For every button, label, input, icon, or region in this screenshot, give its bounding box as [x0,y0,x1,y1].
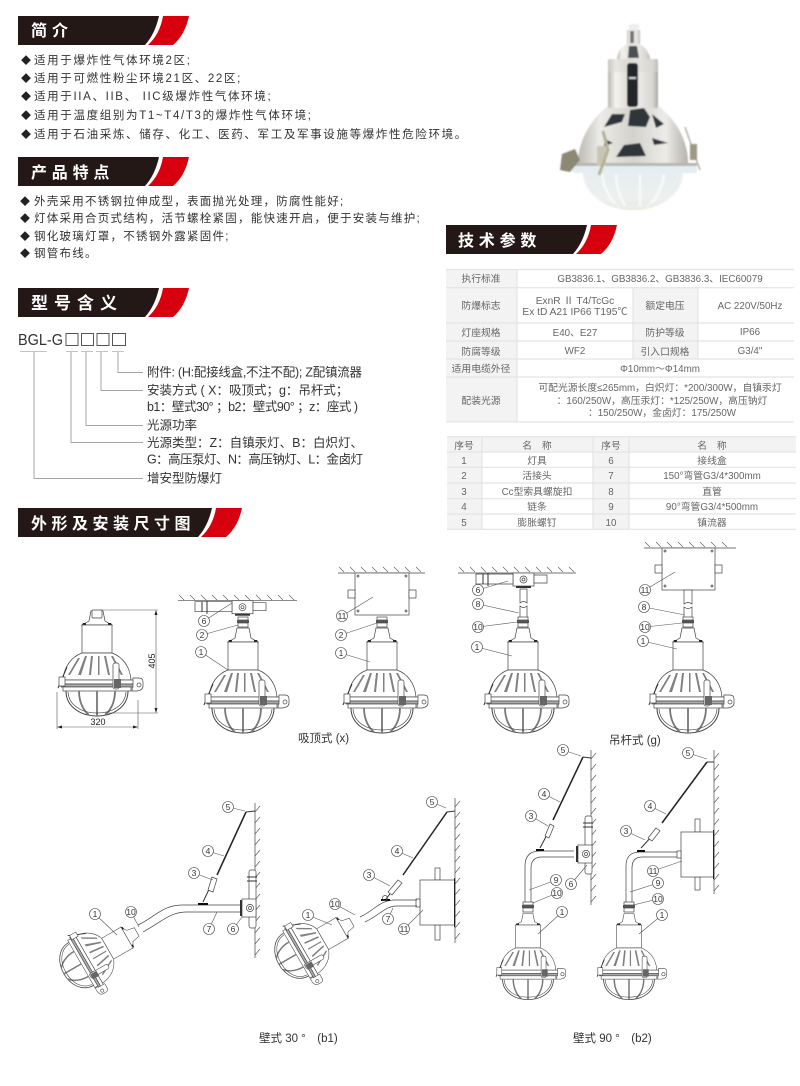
callouts: wall 30 degree: 7 [207,924,212,934]
text block: 产品特点 bullet list: 钢化玻璃灯罩，不锈钢外露紧固件; [34,229,230,243]
table: technical parameters: 配装光源 [461,394,501,407]
table: parts list: 链条 [527,500,547,513]
heading: 型号含义: 型号含义 [31,293,123,313]
table: parts list: 名 称 [522,439,552,452]
table: technical parameters: 灯座规格 [461,326,501,339]
callouts: wall 30 degree with box: 1 [306,910,311,920]
callouts: wall 90 degree: 9 [554,875,559,885]
text block: 产品特点 bullet list: ◆ [20,231,30,243]
table: technical parameters: Ex tD A21 IP66 T195℃ [522,307,628,318]
text block: 简介 bullet list: ◆ [21,129,31,141]
callouts: wall 30 degree with box: 10 [330,899,340,909]
model code diagram: 增安型防爆灯 [147,470,222,486]
model code diagram: 光源类型：Z：自镇汞灯、B：白炽灯、 [147,435,363,450]
callouts: ceiling mount with box [336,597,377,662]
text block: 简介 bullet list: 适用于温度组别为T1~T4/T3的爆炸性气体环境; [34,108,313,122]
text block: 产品特点 bullet list: 灯体采用合页式结构，活节螺栓紧固，能快速开启，便于安装与维护; [34,211,421,225]
caption: 吊杆式 (g): 吊杆式 (g) [609,733,661,747]
text block: 简介 bullet list: ◆ [21,110,31,122]
callouts: wall 90 degree [526,744,587,934]
table: parts list: 膨胀螺钉 [517,516,557,529]
callouts: wall 90 degree with box: 3 [624,826,629,836]
callouts: wall 30 degree [90,802,245,935]
callouts: wall 30 degree: 10 [126,907,136,917]
table: parts list: 8 [608,487,614,498]
model code diagram: 附件: (H:配接线盒,不注不配); Z配镇流器 [147,364,362,380]
model code diagram: 光源功率 [147,418,197,432]
heading: 简介 [18,16,189,45]
text block: 简介 bullet list [21,53,468,141]
heading: 外形及安装尺寸图 [18,508,242,537]
callouts: wall 90 degree with box [620,748,707,934]
table: technical parameters: 防爆标志 [461,299,501,312]
table: technical parameters: 执行标准 [461,272,501,285]
callouts: wall 30 degree with box: 5 [430,797,435,807]
table: parts list: 名 称 [697,439,727,452]
callouts: wall 90 degree: 6 [569,879,574,889]
table: parts list: 1 [461,456,467,467]
callouts: wall 90 degree: 10 [552,888,562,898]
text block: 简介 bullet list: 适用于爆炸性气体环境2区; [34,53,192,67]
callouts: wall 30 degree with box: 4 [395,846,400,856]
table: technical parameters [446,269,794,422]
heading: 产品特点: 产品特点 [31,163,114,182]
table: parts list: 灯具 [527,455,547,467]
table: technical parameters: IP66 [740,327,761,338]
table: parts list: 镇流器 [697,516,727,529]
text block: 简介 bullet list: ◆ [21,55,31,67]
callouts: pendant mount with box [638,572,685,649]
diagram: overall dimensions: 320 [90,717,106,727]
table: parts list: 活接头 [522,469,552,482]
text block: 产品特点 bullet list: 钢管布线。 [34,246,98,260]
heading: 技术参数: 技术参数 [458,231,541,250]
table: parts list: 直管 [702,485,722,498]
text block: 产品特点 bullet list: 外壳采用不锈钢拉伸成型，表面抛光处理，防腐性能好; [34,194,344,208]
callouts: wall 30 degree: 6 [231,924,236,934]
callouts: pendant mount: 8 [476,599,481,609]
callouts: wall 90 degree with box: 5 [686,748,691,758]
table: parts list: 7 [608,471,614,482]
diagram: overall dimensions [57,610,158,729]
callouts: wall 90 degree: 4 [542,789,547,799]
callouts: ceiling mount with box: 1 [339,648,344,658]
callouts: pendant mount [472,581,519,656]
diagram: wall 90 degree with box [597,748,719,1000]
text block: 产品特点 bullet list: ◆ [20,248,30,260]
callouts: ceiling mount: 2 [200,630,205,640]
table: parts list [447,437,796,529]
table: parts list: 90°弯管G3/4*500mm [666,500,758,513]
table: technical parameters: Φ10mm～Φ14mm [620,364,700,375]
callouts: ceiling mount with box: 2 [339,630,344,640]
callouts: wall 90 degree: 5 [561,745,566,755]
table: technical parameters: 防腐等级 [461,345,501,358]
table: parts list: 6 [608,456,614,467]
table: parts list: Cc型索具螺旋扣 [502,485,572,498]
text block: 简介 bullet list: 适用于可燃性粉尘环境21区、22区; [34,71,242,85]
table: technical parameters: 防护等级 [645,326,685,339]
table: parts list: 2 [461,471,467,482]
callouts: pendant mount: 1 [475,642,480,652]
diagram: wall 30 degree with box [263,796,460,996]
diagram: ceiling mount with junction fitting [178,595,297,733]
callouts: wall 90 degree with box: 10 [653,894,663,904]
callouts: pendant mount with box: 1 [641,636,646,646]
callouts: pendant mount with box: 11 [641,585,650,595]
model code diagram: G：高压泵灯、N：高压钠灯、L：金卤灯 [147,452,363,466]
diagram: overall dimensions: 405 [147,653,157,669]
table: technical parameters: AC 220V/50Hz [718,301,782,312]
callouts: wall 90 degree with box: 1 [660,910,665,920]
diagram: wall 30 degree with fitting [48,802,260,1006]
text block: 产品特点 bullet list [20,194,421,260]
diagram: pendant mount with box [638,542,736,733]
callouts: wall 30 degree with box [302,796,446,934]
heading: 简介: 简介 [31,21,73,40]
callouts: pendant mount with box: 8 [642,602,647,612]
callouts: wall 30 degree: 4 [206,846,211,856]
callouts: wall 90 degree with box: 11 [649,866,658,876]
text block: 简介 bullet list: ◆ [21,91,31,103]
table: parts list: 150°弯管G3/4*300mm [663,469,761,482]
heading: 产品特点 [18,157,189,186]
table: technical parameters: ExnR Ⅱ T4/TcGc [536,296,614,307]
table: technical parameters: E40、E27 [553,328,597,339]
table: parts list: 序号 [601,439,621,452]
callouts: wall 90 degree with box: 4 [648,801,653,811]
callouts: wall 30 degree: 3 [192,868,197,878]
callouts: wall 30 degree with box: 3 [367,870,372,880]
diagram: wall 90 degree with fitting [496,744,596,1000]
text block: 产品特点 bullet list: ◆ [20,196,30,208]
table: parts list: 10 [606,518,617,529]
table: parts list: 序号 [454,439,474,452]
table: technical parameters: 引入口规格 [641,345,690,358]
caption: 吸顶式 (x): 吸顶式 (x) [298,732,349,745]
callouts: wall 30 degree: 5 [226,802,231,812]
callouts: wall 30 degree with box: 7 [386,914,391,924]
diagram: ceiling mount with box [336,567,428,733]
callouts: pendant mount with box: 10 [640,622,650,632]
table: technical parameters: ：150/250W，金卤灯：175/250W [588,406,737,419]
table: technical parameters: 额定电压 [645,299,685,312]
model code diagram: 安装方式 ( X：吸顶式；g：吊杆式； [147,382,348,398]
callouts: wall 90 degree: 1 [560,907,565,917]
caption: 壁式 90° (b2): 壁式 90 ° (b2) [573,1031,652,1045]
caption: 壁式 30° (b1): 壁式 30 ° (b1) [259,1031,338,1045]
heading: 型号含义 [18,288,189,317]
table: parts list: 9 [608,502,614,513]
table: technical parameters: GB3836.1、GB3836.2、GB3836.3、IEC60079 [557,274,763,285]
callouts: ceiling mount: 6 [202,616,207,626]
callouts: wall 90 degree with box: 9 [656,878,661,888]
model code diagram: BGL-G [18,332,63,349]
callouts: wall 90 degree: 3 [529,811,534,821]
table: parts list: 接线盒 [697,454,727,467]
callouts: pendant mount: 10 [473,622,483,632]
callouts: ceiling mount [196,603,238,670]
text block: 简介 bullet list: ◆ [21,73,31,85]
table: technical parameters: WF2 [565,346,585,357]
callouts: ceiling mount: 1 [199,647,204,657]
table: parts list: 3 [461,487,467,498]
text block: 产品特点 bullet list: ◆ [20,213,30,225]
model code diagram: b1：壁式30° ；b2：壁式90° ；z：座式 ) [147,399,358,414]
table: technical parameters: 适用电缆外径 [452,362,511,375]
text block: 简介 bullet list: 适用于石油采炼、储存、化工、医药、军工及军事设施等爆炸性危险环境。 [34,127,468,141]
callouts: pendant mount: 6 [476,585,481,595]
callouts: wall 30 degree with box: 11 [400,924,409,934]
heading: 外形及安装尺寸图: 外形及安装尺寸图 [31,514,195,533]
heading: 技术参数 [446,225,617,254]
table: technical parameters: G3/4" [738,346,763,357]
callouts: ceiling mount with box: 11 [338,611,347,621]
callouts: wall 30 degree: 1 [93,909,98,919]
table: parts list: 5 [461,518,467,529]
text block: 简介 bullet list: 适用于IIA、IIB、 IIC级爆炸性气体环境; [34,89,272,103]
model code diagram [18,332,363,486]
diagram: pendant mount with junction fitting [458,567,576,733]
table: technical parameters: 可配光源长度≤265mm，白炽灯：*200/300W，自镇汞灯 [538,381,782,394]
product photo: stainless explosion-proof lamp [560,24,700,210]
table: technical parameters: ：160/250W，高压汞灯：*125/250W，高压钠灯 [557,394,768,407]
table: parts list: 4 [461,502,467,513]
